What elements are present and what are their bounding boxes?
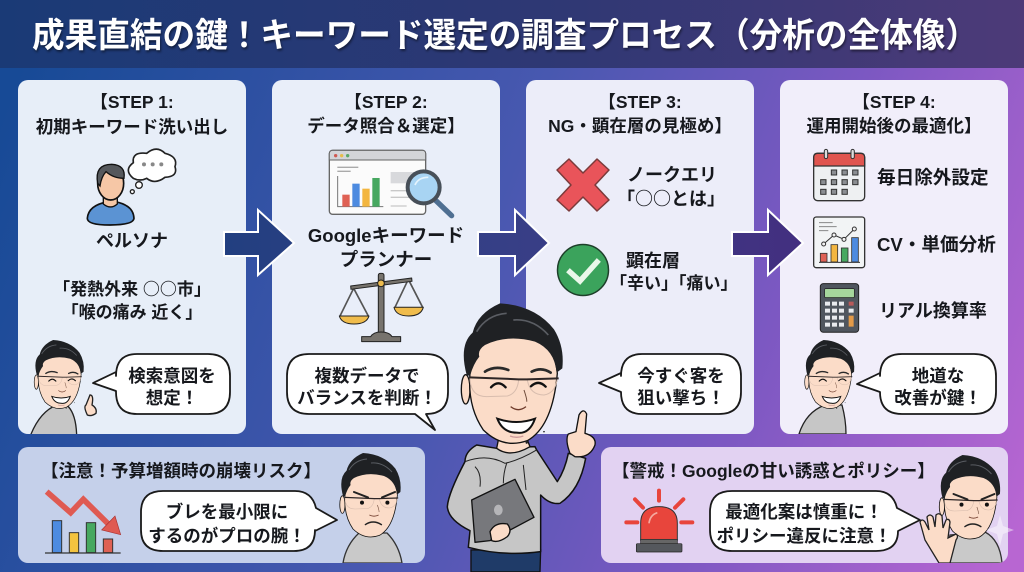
speech bubble: policy: [710, 491, 920, 551]
speech bubble: step 1: 想定！: [146, 388, 198, 408]
panel: Google policy warning: [601, 447, 1008, 563]
step 1 heading: 【STEP 1:: [90, 92, 174, 112]
policy heading: 【警戒！Googleの甘い誘惑とポリシー】: [612, 461, 935, 481]
buying intent text: 顕在層: [626, 251, 680, 271]
title: 成果直結の鍵！キーワード選定の調査プロセス（分析の全体像）: [32, 17, 978, 55]
speech bubble: risk: [141, 491, 337, 551]
icon: falling bar chart: [45, 492, 121, 553]
title band: [0, 0, 1024, 68]
step 4 heading: 【STEP 4:: [852, 92, 936, 112]
character: main presenter: [447, 303, 595, 572]
icon: red cross: [557, 159, 609, 211]
NG query text: 「○○とは」: [617, 185, 725, 211]
risk heading: 【注意！予算増額時の崩壊リスク】: [41, 461, 321, 481]
icon: balance scale: [339, 273, 423, 342]
speech bubble: policy: 最適化案は慎重に！: [725, 502, 883, 522]
character: step 4: [799, 340, 854, 434]
panel: step 2: [272, 80, 500, 434]
speech bubble: step 4: [857, 354, 996, 414]
panel: step 4: [780, 80, 1008, 434]
buying intent text: 「辛い」「痛い」: [610, 273, 738, 293]
step 1 heading: 初期キーワード洗い出し: [36, 117, 228, 137]
icon: calculator: [820, 284, 859, 332]
panel: step 1: [18, 80, 246, 435]
speech bubble: step 2: 複数データで: [314, 366, 420, 386]
panel: step 3: [526, 80, 754, 434]
speech bubble: risk: するのがプロの腕！: [148, 526, 306, 546]
step 3 heading: 【STEP 3:: [598, 92, 682, 112]
CV and unit price label: CV・単価分析: [877, 234, 996, 255]
speech bubble: risk: ブレを最小限に: [166, 502, 288, 522]
keyword examples: 「喉の痛み 近く」: [62, 302, 202, 322]
real conversion rate label: リアル換算率: [879, 300, 987, 321]
arrow: step 2 to 3: [478, 210, 549, 275]
daily exclusion label: 毎日除外設定: [877, 167, 989, 188]
speech bubble: step 2: バランスを判断！: [297, 388, 437, 408]
panel: budget risk warning: [18, 447, 425, 563]
icon: green check: [558, 244, 608, 296]
NG query text: ノークエリ: [627, 165, 717, 185]
character: step 1: [31, 340, 96, 435]
keyword examples: 「発熱外来 ○○市」: [53, 275, 211, 300]
step 2 heading: データ照合＆選定】: [307, 116, 465, 136]
speech bubble: step 4: 改善が鍵！: [894, 388, 982, 408]
step 3 heading: NG・顕在層の見極め】: [548, 116, 732, 136]
speech bubble: step 4: 地道な: [912, 366, 964, 386]
icon: warning siren: [626, 491, 692, 552]
Google keyword planner label: プランナー: [340, 249, 432, 270]
icon: persona with thought bubble: [87, 149, 176, 225]
arrow: step 1 to 2: [224, 210, 294, 275]
speech bubble: step 1: [93, 354, 230, 414]
step 2 heading: 【STEP 2:: [344, 92, 428, 112]
speech bubble: policy: ポリシー違反に注意！: [716, 526, 892, 546]
character: policy: [920, 455, 1002, 563]
icon: analytics chart: [814, 217, 865, 268]
speech bubble: step 3: 狙い撃ち！: [637, 388, 725, 408]
speech bubble: step 3: [599, 354, 741, 414]
Google keyword planner label: Googleキーワード: [308, 225, 464, 246]
step 4 heading: 運用開始後の最適化】: [806, 116, 982, 136]
persona label: ペルソナ: [96, 231, 168, 251]
speech bubble: step 3: 今すぐ客を: [637, 366, 725, 386]
icon: calendar: [814, 149, 865, 201]
character: risk: [340, 453, 402, 563]
arrow: step 3 to 4: [732, 210, 803, 275]
icon: sparkle: [986, 515, 1014, 546]
speech bubble: step 1: 検索意図を: [128, 366, 216, 386]
icon: browser chart and magnifier: [329, 150, 452, 216]
speech bubble: step 2: [287, 354, 448, 430]
